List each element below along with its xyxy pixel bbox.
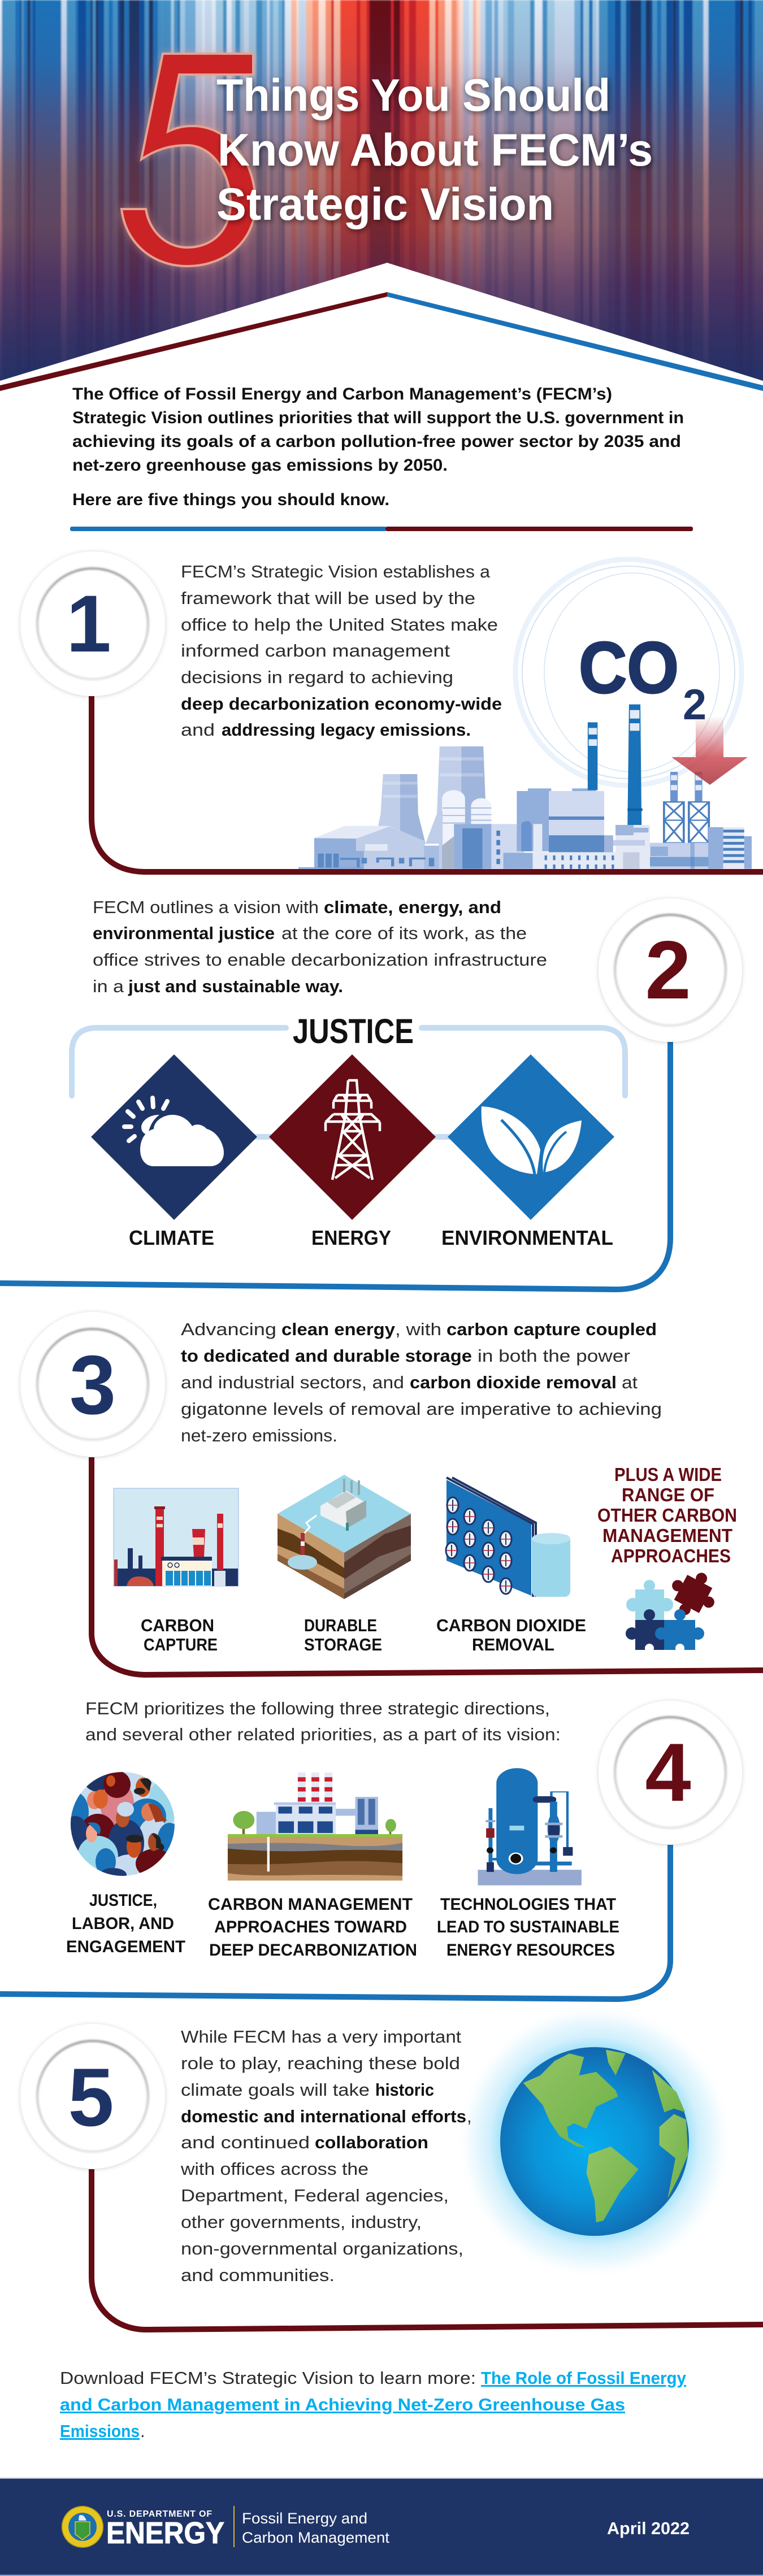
panel: item 3 [20,1312,763,1675]
labels: strategic directions: CARBON MANAGEMENT [208,1895,413,1914]
labels: carbon management approaches: DURABLE [304,1615,377,1635]
text block 1 [181,562,502,740]
text block 2: in a [93,976,124,996]
labels: justice pillars: ENVIRONMENTAL [441,1226,613,1249]
icon: technology vessel [478,1768,582,1886]
illustration: power plant [298,705,752,869]
labels: justice pillars [129,1226,613,1249]
office name: Fossil Energy and [242,2510,367,2527]
text block 5: with offices across the [180,2159,369,2179]
text block 5: and continued [181,2132,310,2152]
text block 1: office to help the United States make [181,615,498,635]
footer [0,2478,763,2575]
text block 5: climate goals will take [181,2080,370,2100]
text block 5: historic [375,2080,434,2100]
number badge 4: 4 [645,1726,691,1818]
intro text: Strategic Vision outlines priorities that will support the U.S. government in [72,409,684,427]
text block 1: informed carbon management [181,641,450,661]
text block 2: at the core of its work, as the [281,923,527,943]
text block 3: in both the power [478,1346,630,1366]
intro text: Here are five things you should know. [72,490,389,509]
connector line 2 [0,1042,670,1289]
panel: item 5 [20,2003,763,2330]
icon: CO2 label [579,628,706,729]
callout: other approaches [597,1464,737,1566]
download text with link: The Role of Fossil Energy [481,2368,687,2388]
icon: CO2 label: CO [579,628,679,709]
big number 5 [122,54,255,266]
intro text: achieving its goals of a carbon pollution-free power sector by 2035 and [72,432,681,451]
callout: other approaches: OTHER CARBON [597,1505,737,1526]
text block 5: , [467,2106,472,2126]
text block 3: to dedicated and durable storage [181,1346,472,1366]
labels: strategic directions [66,1891,619,1960]
number badge 1: 1 [66,579,111,669]
text block 4 [85,1698,561,1744]
icon: carbon capture [114,1488,239,1586]
text block 2: climate, energy, and [324,897,501,917]
labels: strategic directions: LABOR, AND [72,1914,174,1933]
connector line 3 [92,1457,763,1675]
diamond: climate [91,1054,257,1220]
connector line 4 [0,1845,670,1999]
icon: carbon dioxide removal [446,1478,570,1597]
text block 2: just and sustainable way. [128,976,343,996]
icon: transmission tower [326,1080,380,1180]
justice bracket [72,1028,625,1096]
logo divider [233,2506,235,2547]
title: Strategic Vision [216,179,554,230]
labels: strategic directions: DEEP DECARBONIZATION [209,1941,417,1960]
diamond: environmental [448,1054,614,1220]
intro text: The Office of Fossil Energy and Carbon Management’s (FECM’s) [72,385,612,403]
labels: strategic directions: JUSTICE, [89,1891,157,1910]
chevron lines [0,292,763,391]
download text with link: Emissions [60,2421,140,2441]
text block 3: at [622,1372,638,1392]
text block 4: and several other related priorities, as a part of its vision: [85,1724,561,1744]
intro text: net-zero greenhouse gas emissions by 2050. [72,456,448,475]
heading: JUSTICE: JUSTICE [293,1012,414,1050]
labels: justice pillars: CLIMATE [129,1226,214,1249]
icon: plant over storage layers [228,1773,402,1880]
panel: item 4 [0,1698,742,1999]
icon: CO2 label: 2 [683,681,706,729]
title [216,70,653,230]
text block 2: FECM outlines a vision with [93,897,319,917]
text block 2 [93,897,547,996]
icon: puzzle pieces [626,1562,725,1653]
icon: durable storage [278,1475,411,1599]
callout: other approaches: MANAGEMENT [602,1525,732,1546]
date: April 2022 [607,2518,690,2538]
number badge 5 [20,2024,165,2169]
icon: sun and cloud [124,1098,224,1166]
text block 3 [181,1319,662,1445]
divider [70,527,693,531]
text block 5: and communities. [181,2265,335,2285]
number badge 3 [20,1312,165,1457]
text block 3: and industrial sectors, and [181,1372,404,1392]
callout: other approaches: RANGE OF [622,1484,714,1505]
connector line 1 [92,696,763,872]
icon: CO2 rings [515,559,742,785]
intro text [72,385,684,509]
office name [242,2510,390,2546]
labels: strategic directions: TECHNOLOGIES THAT [440,1895,616,1914]
text block 3: Advancing [181,1319,276,1339]
panel: item 2 [0,897,742,1289]
panel: item 1 [20,551,763,872]
download text with link [60,2368,687,2441]
text block 5: other governments, industry, [181,2212,422,2232]
number badge 5: 5 [68,2051,114,2143]
text block 1: and [181,720,215,740]
icon: leaves [482,1106,582,1174]
text block 3: carbon capture coupled [446,1319,657,1339]
text block 5: While FECM has a very important [181,2027,461,2047]
header banner: warming stripes [0,0,763,407]
labels: strategic directions: ENGAGEMENT [66,1938,185,1956]
text block 3: clean energy [281,1319,396,1339]
labels: carbon management approaches: STORAGE [304,1635,382,1654]
text block 2: office strives to enable decarbonization infrastructure [93,950,547,970]
labels: strategic directions: LEAD TO SUSTAINABLE [437,1918,619,1936]
title: Things You Should [216,70,610,121]
text block 5: non-governmental organizations, [181,2239,463,2258]
callout: other approaches: PLUS A WIDE [614,1464,722,1485]
office name: Carbon Management [242,2529,390,2546]
text block 3: carbon dioxide removal [410,1372,617,1392]
callout: other approaches: APPROACHES [611,1545,731,1566]
icon: globe [456,2003,733,2280]
logo: department wordmark: U.S. DEPARTMENT OF [107,2509,212,2519]
number badge 2 [599,898,742,1042]
labels: strategic directions: ENERGY RESOURCES [446,1941,615,1960]
labels: justice pillars: ENERGY [311,1226,391,1249]
icon: people circle [71,1772,175,1876]
diamond: energy [269,1054,436,1220]
text block 4: FECM prioritizes the following three strategic directions, [85,1698,550,1718]
logo: DOE seal [62,2506,103,2548]
labels: carbon management approaches: CARBON DIOXIDE [436,1615,586,1635]
download text with link: . [140,2421,145,2441]
text block 1: framework that will be used by the [181,588,475,608]
arrow: CO2 reduction [671,717,748,785]
text block 1: addressing legacy emissions. [222,720,471,740]
number badge 3: 3 [70,1339,116,1432]
labels: strategic directions: APPROACHES TOWARD [214,1918,407,1936]
number badge 1 [20,551,165,696]
text block 1: deep decarbonization economy-wide [181,694,502,714]
text block 3: net-zero emissions. [181,1426,337,1445]
text block 5: role to play, reaching these bold [181,2053,460,2073]
text block 2: environmental justice [93,923,275,943]
connectors between diamonds [254,1134,450,1140]
text block 1: FECM’s Strategic Vision establishes a [181,562,491,581]
labels: carbon management approaches [141,1615,586,1654]
labels: carbon management approaches: REMOVAL [472,1635,554,1654]
logo: department wordmark: ENERGY [106,2516,224,2550]
number badge 4 [599,1701,742,1844]
title: Know About FECM’s [218,125,653,176]
labels: carbon management approaches: CARBON [141,1615,214,1635]
number badge 2: 2 [645,924,691,1016]
text block 5 [180,2027,472,2285]
download text with link: and Carbon Management in Achieving Net-Zero Greenhouse Gas [60,2395,625,2414]
text block 5: collaboration [315,2132,428,2152]
text block 3: gigatonne levels of removal are imperative to achieving [181,1399,662,1419]
text block 5: domestic and international efforts [181,2106,466,2126]
text block 5: Department, Federal agencies, [181,2186,449,2205]
labels: carbon management approaches: CAPTURE [144,1635,218,1654]
download text with link: Download FECM’s Strategic Vision to learn more: [60,2368,476,2388]
text block 3: , with [395,1319,441,1339]
text block 1: decisions in regard to achieving [181,667,453,687]
connector line 5 [92,2169,763,2330]
